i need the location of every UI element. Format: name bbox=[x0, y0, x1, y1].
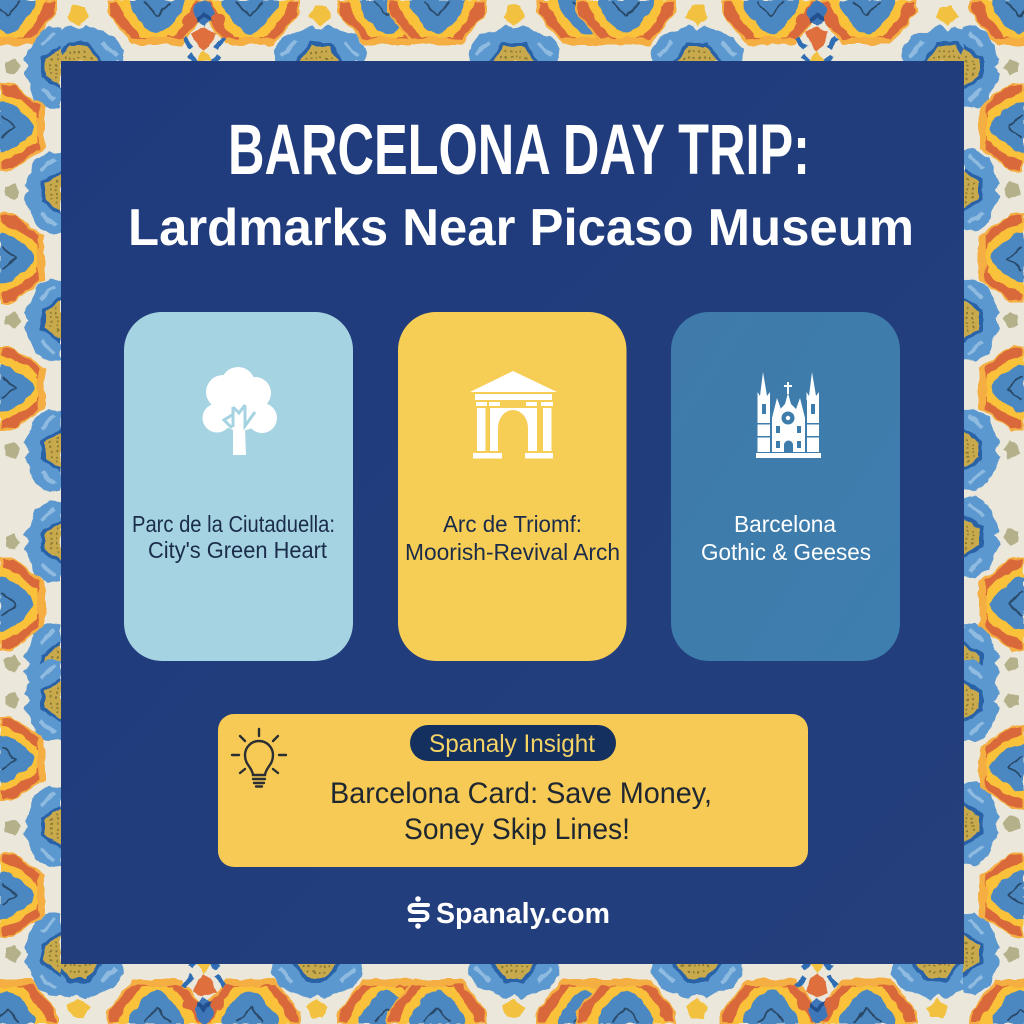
card text: Parc de la Ciutaduella: bbox=[132, 511, 335, 537]
insight badge: Spanaly Insight bbox=[429, 730, 595, 758]
callout text: Soney Skip Lines! bbox=[404, 813, 630, 846]
card text: City's Green Heart bbox=[148, 537, 328, 563]
icon: cathedral bbox=[756, 372, 821, 458]
icon: Spanaly mark bbox=[410, 896, 428, 929]
callout: Spanaly Insight bbox=[218, 714, 808, 867]
title line 2: Lardmarks Near Picaso Museum bbox=[128, 199, 914, 257]
icon: light bulb bbox=[232, 729, 286, 786]
icon: arch bbox=[470, 371, 557, 458]
panel: Parc de la Ciutadella card bbox=[124, 312, 353, 661]
callout text: Barcelona Card: Save Money, bbox=[330, 777, 712, 810]
icon: tree bbox=[202, 367, 277, 455]
card text: Moorish-Revival Arch bbox=[405, 539, 620, 565]
footer logo bbox=[410, 896, 610, 930]
card text: Gothic & Geeses bbox=[701, 539, 871, 565]
card text: Barcelona bbox=[734, 511, 836, 537]
panel: Barcelona Gothic card bbox=[671, 312, 900, 661]
insight badge bbox=[410, 725, 616, 761]
card text: Arc de Triomf: bbox=[443, 511, 582, 537]
title line 1: BARCELONA DAY TRIP: bbox=[228, 111, 810, 190]
panel: Arc de Triomf card bbox=[398, 312, 626, 661]
website text: Spanaly.com bbox=[436, 898, 610, 930]
central navy panel bbox=[61, 61, 964, 964]
